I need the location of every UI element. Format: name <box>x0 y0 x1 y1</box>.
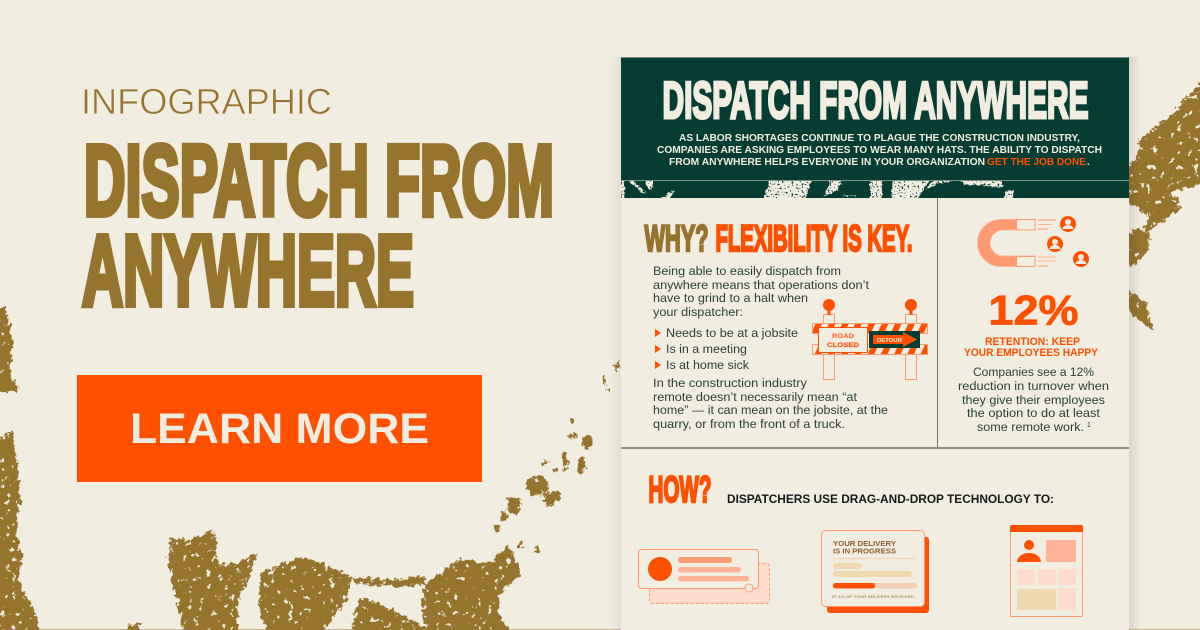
panel: how section <box>638 469 1083 616</box>
bullet list: Is at home sick <box>666 358 750 372</box>
header intro text <box>657 133 1102 168</box>
why closing text: quarry, or from the front of a truck. <box>653 417 845 431</box>
icon: profile dashboard <box>1010 525 1083 616</box>
icon: delivery progress card: IS IN PROGRESS <box>833 546 896 556</box>
panel: retention stat <box>958 216 1109 434</box>
why heading: FLEXIBILITY IS KEY. <box>716 218 912 259</box>
header intro text: GET THE JOB DONE <box>987 157 1086 168</box>
stat description: reduction in turnover when <box>958 379 1109 393</box>
why intro text <box>653 264 870 319</box>
main title <box>82 125 554 327</box>
stat description: they give their employees <box>962 393 1105 407</box>
button: learn more: LEARN MORE <box>130 405 429 453</box>
dividers <box>937 198 938 448</box>
why closing text <box>653 376 888 431</box>
panel: why flexibility <box>644 218 928 431</box>
detour sign: DETOUR <box>877 338 902 344</box>
button: learn more <box>77 375 482 482</box>
why closing text: remote doesn’t necessarily mean “at <box>653 390 858 404</box>
header intro text: AS LABOR SHORTAGES CONTINUE TO PLAGUE THE CONSTRUCTION INDUSTRY, <box>679 133 1080 144</box>
how heading: HOW? <box>648 469 712 510</box>
stat heading: RETENTION: KEEP <box>985 336 1080 348</box>
icon: drag and drop card <box>638 550 770 604</box>
why heading <box>644 218 912 259</box>
icon: delivery progress card <box>822 530 929 613</box>
stat heading: YOUR EMPLOYEES HAPPY <box>964 347 1098 359</box>
why intro text: Being able to easily dispatch from <box>653 264 841 278</box>
icon: road closed barricade <box>812 299 928 380</box>
why closing text: home” — it can mean on the jobsite, at the <box>653 403 888 417</box>
main title: DISPATCH FROM <box>84 125 554 237</box>
eyebrow: infographic: INFOGRAPHIC <box>81 81 332 122</box>
panel: infographic preview <box>621 57 1129 630</box>
stat heading <box>964 336 1098 359</box>
texture: header strip <box>621 181 1014 198</box>
stat description: the option to do at least <box>967 406 1101 420</box>
bullet list: Needs to be at a jobsite <box>666 326 798 340</box>
stat description: 1 <box>1087 422 1091 429</box>
icon: magnet attracting people <box>978 216 1089 267</box>
why heading: WHY? <box>644 218 708 259</box>
header intro text: . <box>1087 157 1090 168</box>
main title: ANYWHERE <box>82 215 414 327</box>
icon: delivery progress card: 57.1% OF YOUR DELIVERY RECEIVED <box>832 595 914 599</box>
stat description <box>958 365 1109 434</box>
why intro text: your dispatcher: <box>653 305 743 319</box>
panel: green header <box>621 57 1129 200</box>
stat description: some remote work. <box>977 420 1084 434</box>
why closing text: In the construction industry <box>653 376 808 390</box>
how subheading: DISPATCHERS USE DRAG-AND-DROP TECHNOLOGY TO: <box>727 493 1054 506</box>
stat: 12%: 12% <box>988 286 1078 334</box>
road closed sign <box>818 328 868 352</box>
bullet list: Is in a meeting <box>666 342 747 356</box>
road closed sign: ROAD <box>832 333 854 340</box>
bullet list <box>655 326 798 372</box>
header intro text: FROM ANYWHERE HELPS EVERYONE IN YOUR ORGANIZATION <box>669 157 985 168</box>
icon: delivery progress card: YOUR DELIVERY <box>833 539 896 548</box>
header intro text: COMPANIES ARE ASKING EMPLOYEES TO WEAR MANY HATS. THE ABILITY TO DISPATCH <box>657 145 1102 156</box>
why intro text: have to grind to a halt when <box>653 291 808 305</box>
road closed sign: CLOSED <box>827 342 859 349</box>
panel shadows <box>1129 57 1141 630</box>
why intro text: anywhere means that operations don’t <box>653 278 870 292</box>
texture: gold speckle arc <box>494 360 619 553</box>
stat description: Companies see a 12% <box>973 365 1094 379</box>
